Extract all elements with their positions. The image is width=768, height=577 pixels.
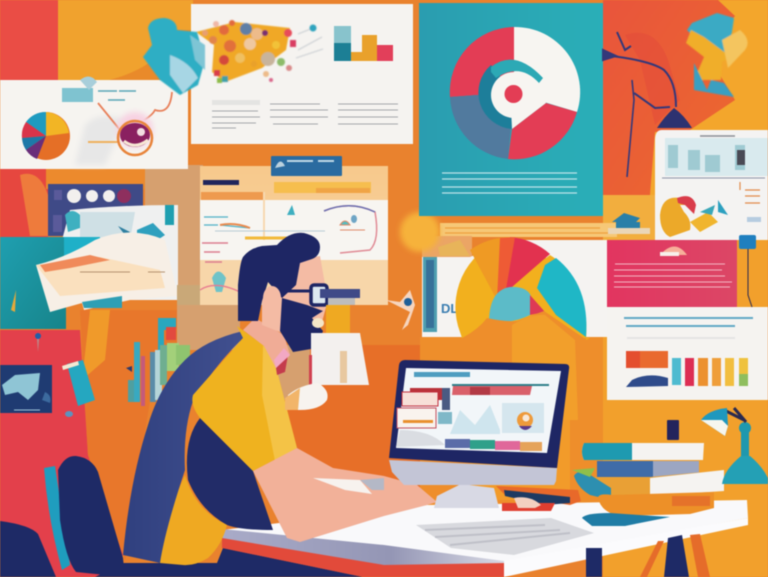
stand bbox=[434, 484, 499, 508]
neck bbox=[243, 318, 290, 372]
text columns bbox=[212, 104, 398, 128]
head bbox=[238, 233, 328, 352]
left inner card bbox=[201, 192, 264, 200]
gray base bbox=[389, 460, 557, 485]
top book bbox=[582, 443, 704, 460]
panel: large teal donut poster bbox=[419, 3, 603, 216]
curve widget bbox=[324, 206, 377, 253]
keyboard bbox=[416, 518, 594, 555]
small house scene bbox=[608, 213, 650, 234]
bars bbox=[626, 351, 748, 387]
pie chart bbox=[455, 237, 590, 340]
chair bbox=[0, 456, 363, 577]
pin and world map card bbox=[0, 333, 52, 413]
panel: middle dashboard sheet bbox=[200, 156, 388, 305]
panel: pink text card bbox=[607, 240, 737, 307]
paper stack and dark infographic card bbox=[48, 184, 178, 300]
desk bbox=[222, 500, 748, 577]
wall tag with string bbox=[739, 235, 756, 307]
frame bbox=[389, 360, 569, 468]
arm bbox=[253, 448, 437, 542]
panel: left pie chart sheet bbox=[0, 76, 188, 169]
panel: central pie sheet bbox=[422, 237, 608, 340]
colourful data cluster bbox=[196, 20, 323, 83]
book stack bbox=[572, 443, 724, 526]
pencil cup bbox=[126, 318, 190, 406]
connector and target icon bbox=[88, 92, 172, 155]
second book bbox=[597, 461, 699, 478]
small paper plane and pin bbox=[386, 290, 415, 330]
orange mound over pie bbox=[427, 311, 590, 420]
screen bbox=[396, 368, 561, 453]
panel: right dashboard sheet bbox=[655, 130, 768, 240]
pie chart bbox=[22, 112, 70, 160]
desk lamp bbox=[667, 408, 768, 484]
stationery under monitor bbox=[496, 486, 581, 511]
teal paint blob bbox=[143, 18, 205, 95]
abstract teal and yellow shape bbox=[686, 13, 748, 97]
callout labels bbox=[62, 76, 136, 102]
back panel bbox=[123, 331, 243, 563]
papers by the person bbox=[285, 289, 369, 410]
donut chart bbox=[450, 27, 580, 159]
teal note bbox=[62, 360, 95, 417]
panel: teal corner bbox=[0, 237, 100, 329]
floating report paper bbox=[36, 232, 200, 312]
torso bbox=[187, 418, 273, 530]
panel: central pie sheet: DL bbox=[441, 301, 458, 316]
glasses bbox=[284, 290, 312, 292]
bar chart bbox=[334, 26, 393, 61]
sleeve bbox=[192, 326, 297, 471]
monitor bbox=[389, 360, 569, 508]
lower lines bbox=[202, 243, 228, 262]
panel: top white report bbox=[191, 4, 413, 144]
third book bbox=[590, 470, 724, 496]
wall lamp bbox=[603, 32, 692, 177]
fourth book bbox=[598, 492, 714, 516]
poster caption bbox=[442, 173, 577, 193]
person bbox=[123, 233, 437, 565]
panel: bar chart sheet bbox=[607, 307, 768, 400]
lower shirt bbox=[160, 475, 227, 565]
